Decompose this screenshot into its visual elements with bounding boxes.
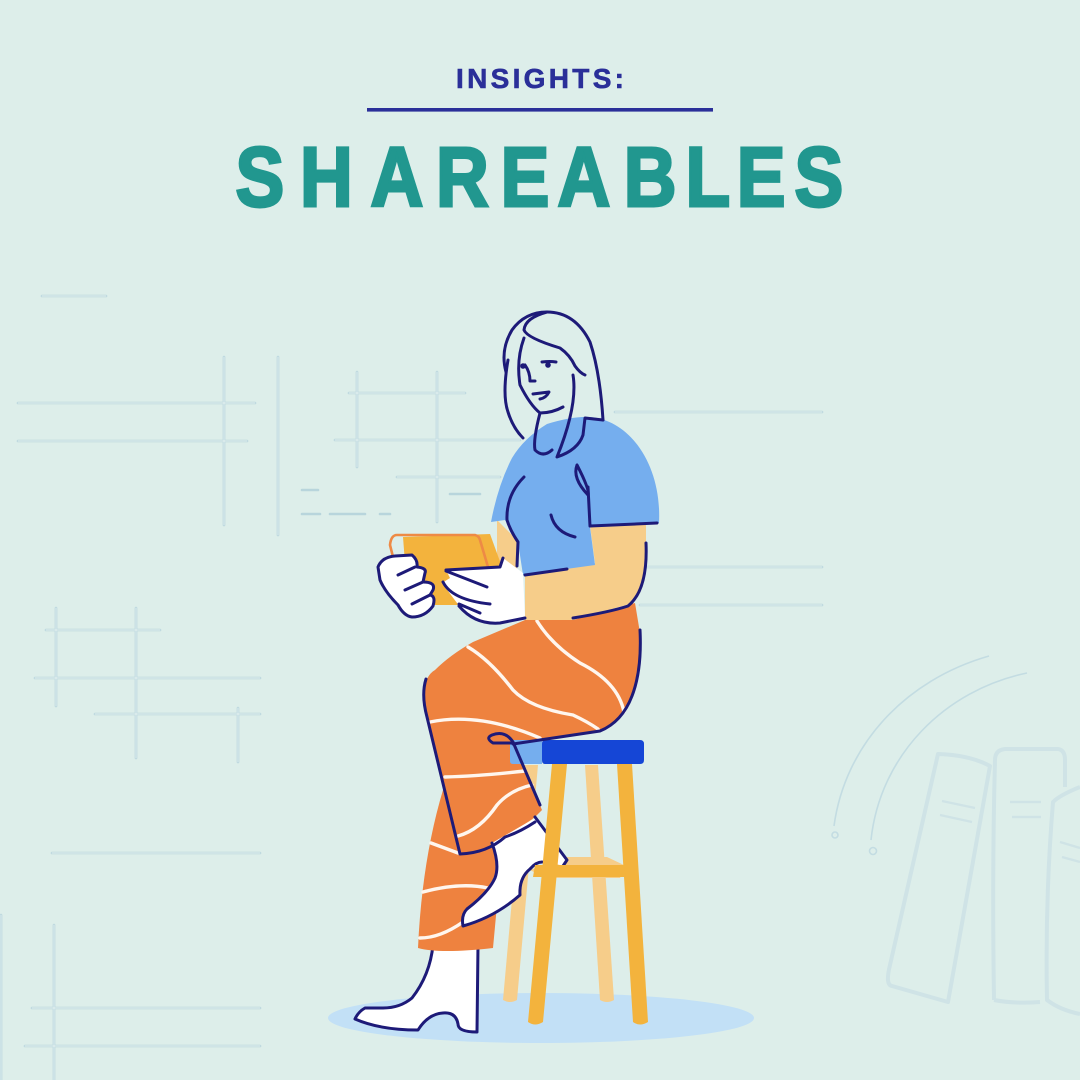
back trouser leg bbox=[418, 790, 497, 951]
label: INSIGHTS: INSIGHTS: bbox=[456, 63, 624, 94]
background sketch: books bbox=[888, 749, 1080, 1014]
heading rule bbox=[367, 108, 713, 112]
right hand bbox=[442, 558, 525, 623]
eyes bbox=[520, 362, 551, 369]
trouser stripes bbox=[420, 621, 624, 938]
floor shadow bbox=[328, 993, 754, 1043]
arms bbox=[497, 520, 646, 620]
back boot bbox=[355, 945, 478, 1032]
stool: back legs bbox=[503, 765, 626, 1002]
trouser outlines bbox=[424, 630, 640, 854]
shirt bbox=[491, 417, 659, 575]
background sketch: window grid lines bbox=[1, 296, 822, 1080]
stool: seat and front legs bbox=[510, 740, 648, 1024]
trousers: thigh and front leg bbox=[423, 603, 640, 854]
tablet bbox=[390, 534, 502, 605]
hair and face lines bbox=[504, 312, 603, 457]
shirt lines bbox=[507, 465, 657, 618]
figure illustration bbox=[355, 312, 659, 1032]
left hand bbox=[378, 555, 434, 617]
front boot bbox=[462, 818, 567, 926]
title: SHAREABLES: SHAREABLES bbox=[236, 130, 843, 224]
background sketch: curved arcs bbox=[832, 656, 1027, 854]
